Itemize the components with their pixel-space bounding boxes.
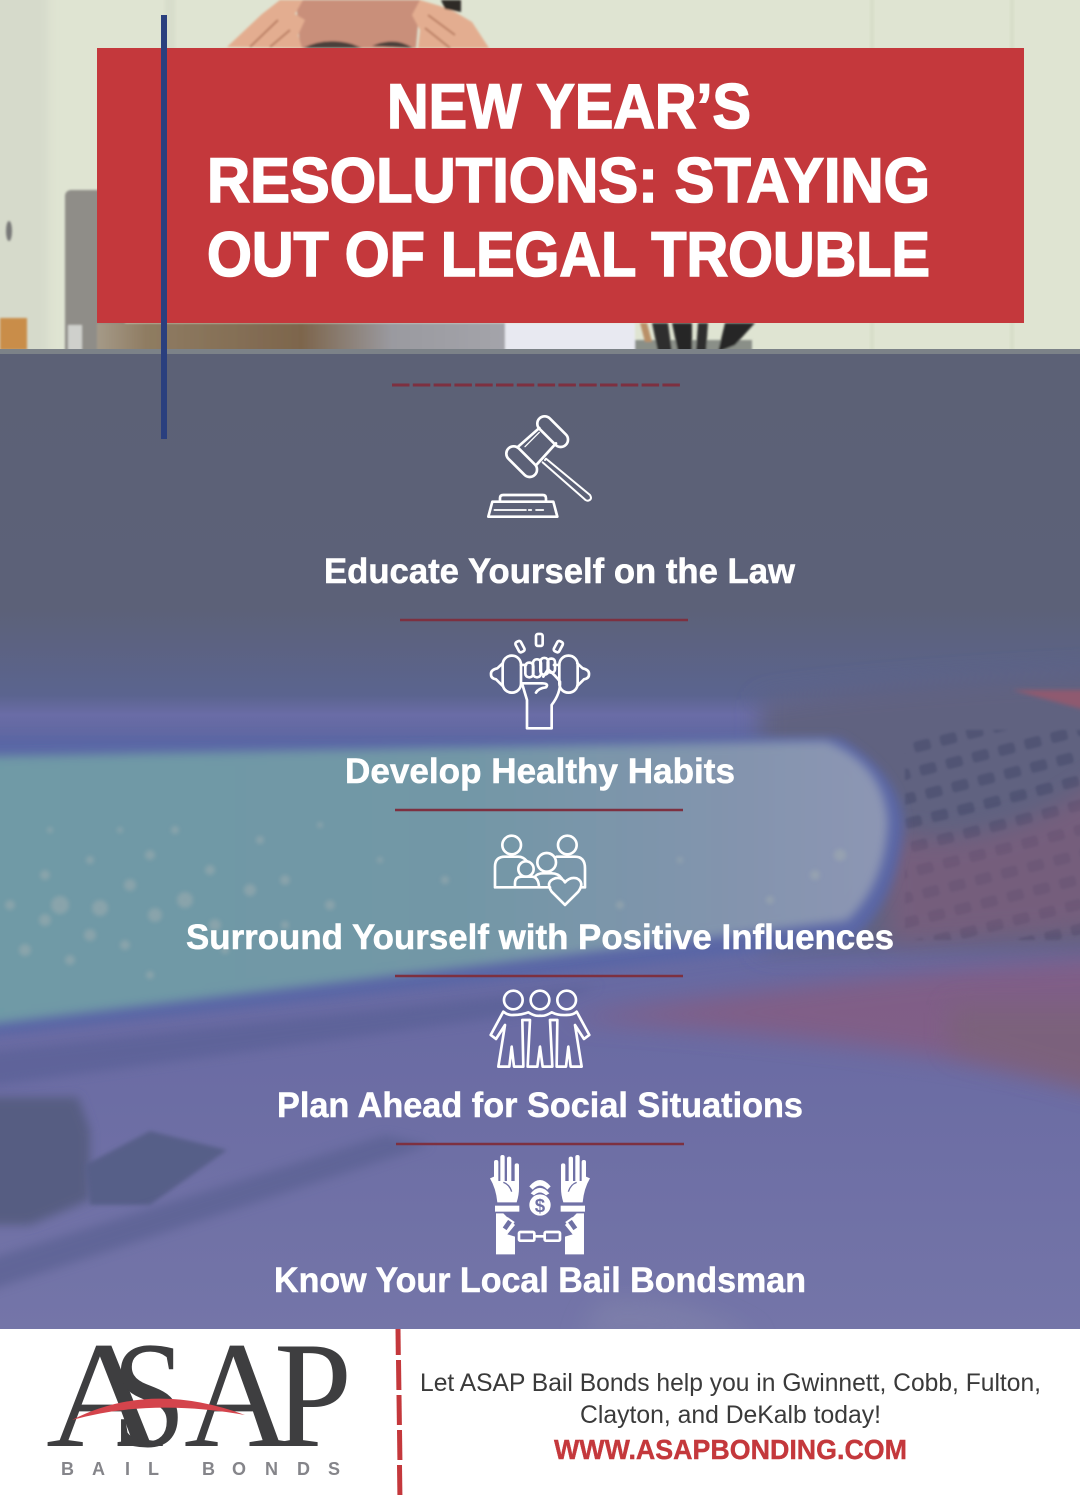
logo: ASAP Bail Bonds: A bbox=[46, 1311, 164, 1479]
title panel bbox=[97, 48, 1024, 323]
title: OUT OF LEGAL TROUBLE bbox=[207, 220, 930, 290]
icon: handcuffed hands and money: $ bbox=[535, 1195, 546, 1216]
logo: ASAP Bail Bonds: S bbox=[112, 1311, 186, 1479]
icon: family with heart bbox=[495, 836, 585, 905]
icon: handcuffed hands and money bbox=[490, 1155, 590, 1254]
logo: ASAP Bail Bonds: A bbox=[184, 1311, 292, 1479]
title: RESOLUTIONS: STAYING bbox=[207, 146, 930, 216]
label: educate: Educate Yourself on the Law bbox=[324, 552, 796, 591]
title bbox=[207, 72, 930, 290]
dashed red separator bbox=[396, 1329, 402, 1495]
icon: three friends bbox=[491, 991, 589, 1067]
logo: ASAP Bail Bonds bbox=[46, 1311, 352, 1479]
label: healthy habits: Develop Healthy Habits bbox=[345, 752, 735, 791]
icon: fist and dumbbell bbox=[491, 634, 589, 728]
dashed red divider bbox=[392, 384, 681, 386]
title: NEW YEAR’S bbox=[387, 72, 751, 142]
photo: man at desk bbox=[0, 0, 1080, 376]
man's neck and hands bbox=[227, 0, 489, 48]
logo: ASAP Bail Bonds: BAILBONDS bbox=[61, 1459, 340, 1479]
logo: ASAP Bail Bonds: P bbox=[274, 1311, 352, 1479]
footer call to action: Let ASAP Bail Bonds help you in Gwinnett, Cobb, Fulton, bbox=[420, 1369, 1041, 1397]
label: social situations: Plan Ahead for Social Situations bbox=[277, 1086, 803, 1125]
background panel: blurred book image with blue tint bbox=[0, 354, 1080, 1340]
label: positive influences: Surround Yourself with Positive Influences bbox=[186, 918, 894, 957]
footer call to action bbox=[420, 1369, 1041, 1465]
label: bail bondsman: Know Your Local Bail Bondsman bbox=[274, 1261, 806, 1300]
footer call to action: Clayton, and DeKalb today! bbox=[580, 1401, 881, 1429]
icon: gavel bbox=[488, 413, 591, 517]
footer bbox=[0, 1311, 1080, 1500]
accent: vertical blue line bbox=[161, 15, 167, 439]
footer call to action: WWW.ASAPBONDING.COM bbox=[554, 1434, 907, 1465]
